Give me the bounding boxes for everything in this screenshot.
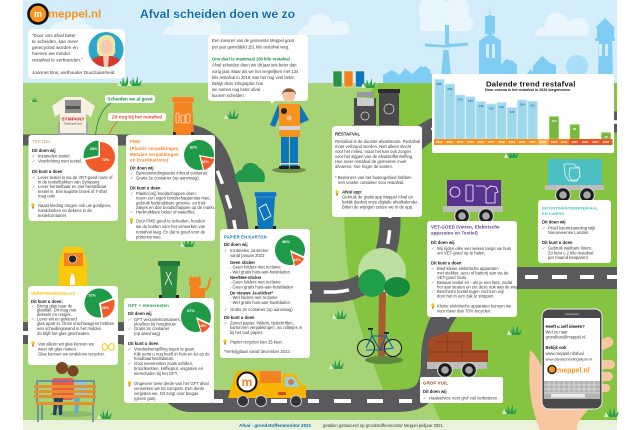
- panel: incontinentiemateriaal: per maand besparen!: [548, 255, 588, 260]
- panel: GFT: GFT verzamelcontainers,: [134, 317, 181, 322]
- far skyline: [383, 66, 432, 84]
- bars: 136: [509, 110, 515, 114]
- panel: GFT: ✓: [128, 326, 132, 331]
- clouds: [50, 0, 589, 36]
- panel: grof vuil: Dit doen wij: [423, 389, 446, 394]
- brand Sympany: SYMPANY: [61, 116, 85, 122]
- panel: PMD: Dit kunt u doen: [130, 186, 161, 190]
- panel: GFT: plus/bon bij hoogbouw.: [134, 322, 177, 326]
- yellow collection truck: [228, 371, 306, 406]
- tip afval app: bekijk dankzij onze digitale afvalkalender.: [342, 200, 419, 204]
- bars: 167: [468, 99, 473, 103]
- panel: verpakkingsglas: glasbak. Dit mag met: [37, 308, 77, 312]
- logo meppel.nl: [28, 4, 101, 24]
- panel: restafval: voor het stijgen van de afvalstoffenheffing.: [335, 154, 413, 159]
- panel: verpakkingsglas: deksels en restjes.: [37, 312, 72, 317]
- panel: introduction: we samen nog beter afval: [212, 87, 260, 92]
- upper road: [23, 122, 617, 292]
- panel: incontinentiemateriaal: Dit kunt u doen: [542, 240, 573, 245]
- panel: quote: [28, 29, 125, 78]
- road network: [23, 122, 617, 401]
- phone logo: meppel.nl: [557, 368, 590, 374]
- footer band: [23, 420, 617, 430]
- arrow: red: [106, 121, 118, 140]
- phone text: Wel ze naar: [546, 330, 568, 334]
- panel: textiel: ✓: [32, 154, 36, 158]
- panel: introduction: Bekijk deze infographic hoe: [212, 81, 264, 86]
- panel: VET-goed: ✓: [431, 246, 435, 251]
- purple VET-goed truck: [443, 180, 503, 224]
- panel: VET-goed: [427, 221, 520, 319]
- pie chart papier: [275, 235, 305, 266]
- panel: PMD: ✓: [130, 170, 134, 176]
- textile container: [52, 97, 95, 137]
- panel: verpakkingsglas: glas apart in. Onze vrachtwagens hebben: [37, 321, 115, 326]
- pie chart papier: 14%: [293, 258, 301, 262]
- panel: papier en karton: Nee/Nee-sticker: [230, 275, 262, 280]
- panel: GFT: eierschalen bij het GFT.: [134, 371, 178, 376]
- pie chart papier: 86%: [282, 240, 290, 244]
- panel: GFT: ✓: [128, 361, 132, 366]
- panel: PMD: Herbruikbare beker of waterfles.: [136, 210, 196, 214]
- tip textiel: textielcontainer.: [38, 213, 67, 218]
- heading grof vuil: GROF VUIL: [423, 380, 448, 386]
- panel: VET-goed: ✓: [431, 266, 435, 271]
- panel: VET-goed: Dit doen wij: [431, 240, 454, 245]
- heading GFT: GFT + etensresten: [128, 303, 169, 308]
- tip VET-goed: [431, 303, 512, 314]
- pie chart GFT: [181, 302, 211, 333]
- panel: dalende trend restafval chart: [432, 74, 614, 153]
- heading PMD: PMD: [130, 139, 140, 144]
- logo meppel.nl: meppel.nl: [48, 8, 101, 20]
- panel: textiel: in de textielbakken van Sympany.: [38, 180, 100, 184]
- panel: GFT: Voedselverspilling tegen te gaan.: [134, 346, 195, 352]
- panel: GFT: Dit kunt u doen: [128, 341, 159, 346]
- panel: papier en karton: - Wel folders met reclame: [230, 295, 278, 300]
- year axis: 2019: [509, 140, 516, 144]
- tip textiel: handdoeken en dekens in de: [38, 208, 92, 213]
- panel: papier en karton: *Verkrijgbaar vanaf december 2022.: [224, 349, 291, 354]
- lower road: [23, 277, 617, 401]
- houses: [420, 66, 430, 74]
- heading papier: PAPIER EN KARTON: [224, 234, 267, 239]
- panel: restafval: een unieke container voor restafval.: [338, 180, 404, 185]
- water tower: [595, 18, 615, 76]
- heading incontinentiemateriaal: INCONTINENTIEMATERIAAL: [542, 205, 599, 210]
- pie chart glas: 28%: [102, 306, 110, 310]
- panel: introduction: kilo restafval in 2019, kan het nog veel beter.: [212, 75, 295, 80]
- panel: verpakkingsglas: Dit kunt u doen:: [31, 299, 63, 304]
- heading textiel: TEXTIEL: [32, 139, 51, 144]
- panel: PMD: [126, 135, 215, 241]
- green statement: One doel is maximaal 100 kilo restafval: [212, 56, 290, 62]
- phone text: Heeft u zelf ideeën?: [546, 324, 585, 329]
- tip afval app: Afval app:: [341, 190, 363, 194]
- pie chart PMD: 18%: [201, 160, 209, 164]
- pie chart PMD: 82%: [190, 146, 198, 150]
- heading VET-goed: apparaten en Textiel): [431, 230, 478, 235]
- panel: restafval: afvoeren, hoe hoger de kosten.: [335, 164, 393, 169]
- pie chart glas: [84, 288, 115, 318]
- year axis: 2022: [540, 140, 547, 144]
- panel: textiel: mag ook!: [38, 193, 55, 198]
- panel: incontinentiemateriaal: ✓: [542, 225, 546, 230]
- bright grass area: [344, 83, 617, 420]
- tip PMD: portemonnee.: [136, 234, 162, 240]
- tip GFT: verwerken we tot compost. Een derde: [134, 386, 205, 391]
- bars: 151: [530, 104, 535, 108]
- callout: scheiden we al goed: [105, 95, 155, 103]
- year axis: 2028: [603, 140, 610, 144]
- bicycle: [358, 328, 403, 364]
- year axis: 2020: [519, 140, 526, 144]
- quote text: [32, 33, 115, 75]
- year axis: 2021: [529, 140, 536, 144]
- quote text: gerecycled worden en: [32, 45, 78, 50]
- panel: incontinentiemateriaal: Gebruik wasbare luiers.: [548, 246, 592, 250]
- pie chart GFT: 13%: [199, 324, 207, 328]
- panel: introduction: kunnen scheiden.: [212, 93, 245, 98]
- panel: PMD: ✓: [130, 175, 134, 180]
- panel: VET-goed: met stekker, accu of batterij aan via de: [437, 270, 509, 276]
- tip afval app: Bitten de wijzigen zetten we in de app.: [342, 204, 413, 210]
- panel: VET-goed: Bied kleine elektrische apparaten: [437, 266, 499, 271]
- icon: orange cat: [189, 276, 211, 299]
- heading VET-goed: [431, 224, 500, 235]
- panel: introduction: Een inwoner van de gemeente Meppel gooit: [212, 38, 295, 43]
- bars: 80: [573, 127, 577, 131]
- phone text: grondbus@meppel.nl: [546, 334, 585, 340]
- panel: verpakkingsglas: Breng glas naar de: [37, 304, 73, 308]
- tip afval app: Gebruik de gratis app Meppel Afval en: [342, 194, 414, 200]
- tip textiel: Naast kleding mogen ook uw gordijnen,: [38, 203, 111, 208]
- panel: GFT: Gooi etensresten zoals schillen,: [134, 361, 193, 366]
- panel: papier en karton: Dit kunt u doen: [224, 315, 255, 320]
- small coloured bins: [333, 71, 364, 87]
- bars: 239: [437, 82, 442, 86]
- panel: PMD: neem een eigen boodschappentas mee,: [136, 196, 211, 200]
- quote text: te scheiden, kan meer: [32, 39, 79, 44]
- chart title: Dalende trend restafval: [486, 80, 576, 88]
- tip GFT: vergisten we. Dit zorgt voor biogas: [134, 391, 198, 396]
- panel: papier en karton: bij het oud papier.: [230, 330, 263, 335]
- hand holding phone: [529, 335, 615, 430]
- phone text: www.afvalscheidingwijzer.nl: [546, 358, 592, 362]
- year axis: 2013: [447, 140, 453, 144]
- portrait of alderwoman: [88, 32, 124, 67]
- panel: GFT: Dit doen wij: [128, 311, 152, 316]
- panel: VET-goed: ✓: [431, 289, 435, 294]
- footer source: getallen gebaseerd op grondstoffenmonitor Meppel peiljaar 2021.: [323, 423, 444, 428]
- pie chart GFT: 87%: [187, 309, 195, 313]
- quote text: restafval te verbranden.”: [32, 58, 83, 62]
- quote text: hoeven we minder: [32, 51, 71, 56]
- year axis: 2012: [436, 140, 443, 144]
- year axis: 2018: [498, 140, 505, 144]
- panel: GFT: ✓: [128, 317, 132, 322]
- bush: [235, 163, 265, 182]
- footer title: Afval - grondstoffenmonitor 2021: [239, 423, 312, 428]
- year axis: 2023: [551, 140, 558, 144]
- panel: verpakkingsglas: ✓: [31, 304, 35, 308]
- year axis: 2026: [582, 140, 589, 144]
- yellow glass container: [59, 247, 87, 286]
- couple on bench: [34, 362, 96, 422]
- panel: restafval: * Bewoners van het buitengebied hebben: [335, 175, 412, 180]
- arrow: green: [93, 103, 111, 140]
- panel: papier en karton: Geen sticker: [230, 260, 256, 265]
- truck logo: m: [242, 375, 252, 389]
- panel: PMD: ✓: [130, 191, 134, 196]
- bars: 146: [478, 104, 484, 108]
- panel: introduction: per jaar gemiddeld 151 kilo restafval weg.: [212, 44, 289, 50]
- panel: textiel: Dit doen wij: [32, 148, 56, 153]
- phone text: Bekijk ook: [546, 345, 567, 350]
- panel: PMD: zakjes en doe boodschappen op de markt.: [136, 205, 215, 210]
- panel: introduction: Afval scheiden doen we dit jaar iets beter dan: [212, 62, 297, 68]
- tip PMD: restafval laag. En dat is goed voor de: [136, 229, 206, 234]
- panel: VET-goed: Bewaar textiel en - als je een fiets, zodat: [437, 280, 513, 285]
- panel: PMD: Dit doen wij: [130, 166, 154, 170]
- year axis: 2024: [561, 140, 568, 144]
- panel: restafval: Restafval is de duurste afvalstroom. Restafval: [335, 139, 420, 144]
- tip PMD: Door PMD goed te scheiden, houden: [136, 218, 206, 224]
- panel: grof vuil: ✓: [423, 396, 427, 401]
- callout: scheiden we al goed: Scheiden we al goed: [107, 97, 153, 102]
- logo meppel.nl: m: [34, 9, 42, 19]
- panel: VET-goed: Wij rijden elke vier weken langs uw huis: [437, 246, 511, 251]
- panel: PMD: ✓: [130, 210, 134, 214]
- panel: introduction: [208, 35, 308, 104]
- heading PMD: [130, 139, 180, 162]
- textile container: Textiel geeft door: [64, 122, 82, 126]
- panel: verpakkingsglas: ✓: [31, 316, 35, 322]
- panel: papier en karton: - Geen folders met reclame: [230, 280, 281, 284]
- tip textiel: [31, 203, 111, 218]
- panel: incontinentiemateriaal: Zo kunt u 2 kilo restafval: [548, 250, 593, 255]
- bench: [34, 381, 96, 422]
- panel: papier en karton: Zamel papier, folders, tijdschriften,: [230, 320, 294, 326]
- panel: grof vuil: Haalservice voor grof vuil verbeteren.: [429, 396, 498, 401]
- panel: papier en karton: ✓: [224, 320, 228, 326]
- panel: textiel: Inzamelen textiel.: [38, 154, 71, 158]
- panel: incontinentiemateriaal: Proef luierinzameling wijk: [548, 225, 596, 230]
- panel: papier en karton: ✓: [224, 248, 228, 253]
- panel: papier en karton: ✓: [224, 307, 228, 312]
- panel: GFT: [124, 298, 214, 403]
- icon: infinity: [102, 344, 114, 350]
- tip GFT: Ongeveer twee derde van het GFT afval: [134, 381, 209, 386]
- panel: textiel: ✓: [32, 184, 36, 189]
- panel: VET-goed: ✓: [431, 280, 435, 285]
- tip glas: Van alleen wit glas kunnen we: [38, 342, 95, 346]
- orange PMD bin: [172, 97, 194, 137]
- tree: [358, 248, 410, 358]
- panel: GFT: (op aanvraag): [134, 331, 161, 336]
- bars: 100: [551, 119, 557, 123]
- panel: introduction: vorig jaar. Maar als we het vergelijken met 134: [212, 69, 299, 74]
- year axis: 2027: [592, 140, 599, 144]
- panel: textiel: Dit kunt u doen: [32, 169, 63, 174]
- pie chart textiel: 28%: [90, 147, 98, 151]
- panel: incontinentiemateriaal: Dit doen wij: [542, 220, 566, 224]
- icon: grass tufts: [30, 76, 619, 419]
- sky background: [23, 0, 617, 90]
- tip VET-goed: Kleine elektrische apparaten kunnen we: [437, 304, 512, 308]
- phone text: www.meppel.nl/afval: [546, 351, 584, 356]
- skyline of Meppel: [383, 5, 615, 84]
- tip PMD: [130, 218, 206, 240]
- panel: verpakkingsglas: een scheidingswand in het midden.: [37, 326, 102, 331]
- tip glas: Glas kunnen we eindeloos recyclen.: [38, 352, 105, 356]
- heading incontinentiemateriaal: [542, 205, 599, 216]
- year axis: 2014: [457, 140, 464, 144]
- tip GFT: (groen gas).: [134, 396, 157, 401]
- panel: restafval: [332, 126, 422, 217]
- quote text: Joannet Bos, wethouder Duurzaamheid: [32, 70, 115, 75]
- blue paper bin: [254, 192, 276, 230]
- phone text: [546, 324, 592, 362]
- panel: restafval: voor het milieu, maar het kan ook zorgen: [335, 149, 412, 154]
- windmill: [425, 25, 468, 76]
- panel: GFT: ✓: [128, 346, 132, 352]
- panel: verpakkingsglas: Zo blijft het glas gescheiden.: [37, 331, 90, 336]
- panel: VET-goed: door het in een zak te stoppen.: [437, 294, 495, 298]
- panel: textiel: ✓: [32, 175, 36, 180]
- tip PMD: we de kosten voor het verwerken van: [136, 224, 206, 229]
- callout: zit nog bij het restafval: [108, 113, 166, 121]
- character: waste collector: [270, 88, 309, 173]
- people: [52, 362, 87, 415]
- panel: papier en karton: De nieuwe Ja-sticker*: [230, 290, 273, 296]
- panel: papier en karton: kartonnen verpakkingen, wc rolletjes in: [230, 325, 303, 330]
- year axis: 2016: [478, 140, 484, 144]
- tip afval app: [335, 190, 419, 210]
- panel: incontinentiemateriaal: Nieuwveense Landen.: [548, 230, 589, 235]
- pie chart textiel: 72%: [102, 158, 110, 162]
- panel: textiel: Lever textiel in via de VET-goed route of: [38, 175, 113, 180]
- teal incontinence truck: [545, 159, 604, 203]
- heading restafval: RESTAFVAL: [335, 131, 361, 136]
- church tower: [479, 5, 501, 76]
- panel: grof vuil: [420, 377, 503, 403]
- bars: 174: [458, 98, 463, 102]
- panel: papier en karton: - Geen gratis huis-aan-huisbladen: [230, 284, 294, 290]
- panel: VET-goed: VET-goed route.: [437, 275, 468, 280]
- pie chart glas: 72%: [88, 294, 96, 298]
- panel: papier en karton: [220, 229, 310, 358]
- fingers: [589, 335, 615, 392]
- panel: PMD: Gratis 2e container (op aanvraag).: [136, 175, 200, 180]
- grass: [23, 83, 617, 420]
- panel: papier en karton: - Wel gratis huis-aan-huisbladen: [230, 300, 291, 305]
- year axis: 2015: [467, 140, 474, 144]
- trailer with bulky waste: [427, 332, 488, 378]
- panel: GFT: broodkorsten, koffieprut, visgraten en: [134, 366, 204, 371]
- panel: textiel: [28, 135, 118, 221]
- keyboard: [544, 381, 600, 399]
- panel: PMD: Plastic(vrij) boodschappen doen:: [136, 191, 197, 196]
- heading incontinentiemateriaal: EN LUIERS: [542, 211, 564, 216]
- bins: restafval containers: [352, 89, 402, 128]
- panel: papier en karton: Inzamelen Ja-sticker: [230, 248, 269, 253]
- panel: VET-goed: om VET-goed op te halen.: [437, 251, 486, 256]
- phone: [542, 309, 602, 409]
- heading VET-goed: VET-GOED (Vetten, Elektrische: [431, 224, 500, 229]
- panel: GFT: houdbaarheidsdatum.: [134, 356, 175, 361]
- title: Afval scheiden doen we zo: [140, 7, 295, 21]
- panel: restafval: Hoe meer restafval de gemeente moet: [335, 159, 407, 164]
- panel: PMD: Bewustwordingsactie inhoud container.: [136, 170, 208, 176]
- bars: [435, 80, 611, 139]
- panel: VET-goed: Dit kunt u doen: [431, 260, 462, 266]
- pie chart textiel: [84, 140, 115, 172]
- pie chart PMD: [184, 140, 215, 170]
- tip VET-goed: voor meer dan 70% recyclen.: [437, 308, 491, 314]
- panel: verpakkingsglas: Lever wit en gekleurd: [37, 316, 77, 322]
- heading verpakkingsglas: VERPAKKINGSGLAS: [31, 291, 75, 296]
- panel: textiel: textiel in. Een kapotte broek of T-shirt: [38, 189, 108, 194]
- year axis: 2025: [571, 140, 578, 144]
- tip GFT: [128, 381, 209, 401]
- callout: zit nog bij het restafval: Zit nog bij het restafval: [112, 115, 162, 120]
- panel: textiel: Voorlichting over textiel.: [38, 158, 82, 164]
- tip papier: Papier recyclen kan 25 keer.: [230, 340, 283, 344]
- panel: PMD: gebruik herbruikbare groente- en fruit-: [136, 200, 207, 205]
- panel: papier en karton: Dit doen wij: [224, 242, 248, 247]
- year axis: [434, 139, 612, 145]
- panel: textiel: Lever herstelbaar en niet herstelbaar: [38, 184, 107, 189]
- bars: 50: [604, 135, 608, 139]
- bars: 142: [489, 106, 494, 110]
- panel: papier en karton: - Geen folders met reclame: [230, 264, 281, 270]
- chart subtitle: Door corona is het restafval in 2020 toegenomen: [485, 88, 571, 92]
- quote text: “Door ons afval beter: [32, 33, 76, 38]
- bars: 218: [447, 87, 453, 91]
- bars: 154: [520, 102, 525, 106]
- panel: textiel: ✓: [32, 158, 36, 164]
- tip glas: [31, 341, 105, 356]
- bars: 145: [499, 105, 504, 109]
- panel: GFT: Kijk eerst u nog heeft in huis en let op de: [134, 352, 210, 356]
- panel: incontinentiemateriaal: ✓: [542, 246, 546, 250]
- green GFT bin: [158, 261, 180, 299]
- tip glas: weer wit glas maken.: [38, 346, 77, 352]
- panel: verpakkingsglas: [28, 286, 118, 365]
- panel: VET-goed: Bescherm textiel tegen vocht en wijl: [437, 289, 504, 294]
- heading PMD: en Drankkartons): [130, 158, 169, 162]
- heading PMD: Metalen verpakkingen: [130, 152, 179, 157]
- panel: VET-goed: het aan straten en zet deze ook aan de weg.: [437, 284, 520, 290]
- heading PMD: (Plastic verpakkingen,: [130, 146, 180, 151]
- year axis: 2017: [488, 140, 495, 144]
- panel: papier en karton: - Wel gratis huis-aan-huisbladen: [230, 270, 291, 274]
- panel: restafval: moet verbrand worden. Niet alleen slecht: [335, 144, 412, 149]
- panel: papier en karton: Gratis 2e container (op aanvraag): [230, 307, 293, 312]
- panel: incontinentiemateriaal: [538, 200, 611, 263]
- panel: GFT: Gratis 2e container: [134, 326, 170, 331]
- panel: papier en karton: vanaf januari 2023: [230, 253, 265, 258]
